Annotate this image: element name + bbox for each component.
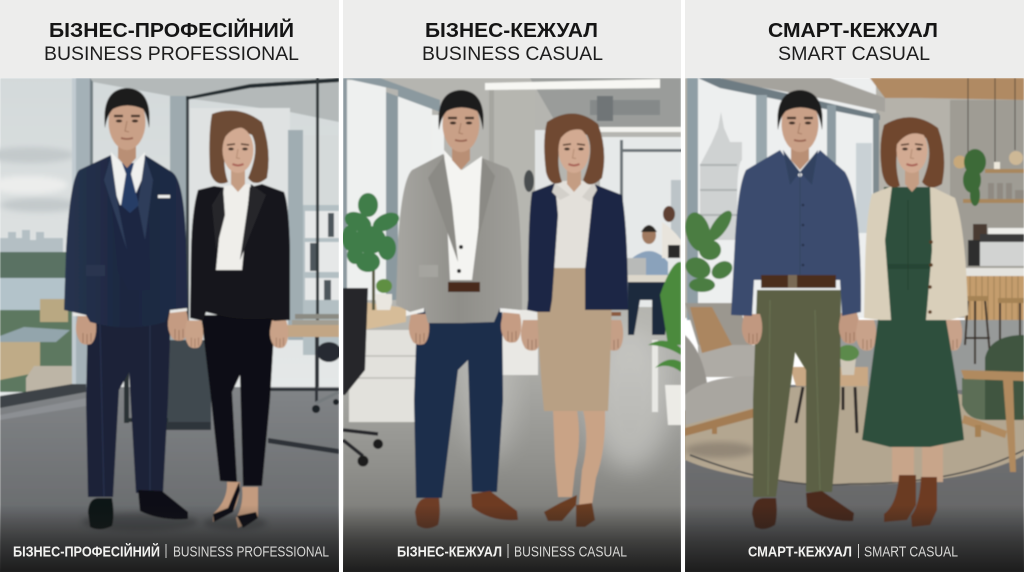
woman in navy cardigan and beige skirt <box>521 113 628 527</box>
heading: business professional: BUSINESS PROFESSIONAL <box>44 44 299 65</box>
man in grey blazer and navy chinos <box>396 90 522 528</box>
man in navy three-piece suit <box>64 88 188 529</box>
office background: glass walls and city view <box>0 78 339 418</box>
caption: business professional: BUSINESS PROFESSIONAL <box>173 544 329 560</box>
man in blue shirt and olive chinos <box>731 90 861 529</box>
heading: smart casual: СМАРТ-КЕЖУАЛ <box>768 20 938 42</box>
heading: business professional <box>0 0 339 78</box>
plant: right <box>648 262 681 372</box>
bottom gradient <box>685 505 1024 572</box>
caption: business casual <box>398 544 627 558</box>
floor, desk, cabinet and chair <box>343 288 681 572</box>
heading: business casual: БІЗНЕС-КЕЖУАЛ <box>425 20 598 42</box>
photo: business casual office <box>342 78 682 572</box>
lounge background: windows, tower, ceiling, wall <box>685 78 1024 336</box>
background colleagues at a desk <box>625 206 681 335</box>
woman in black trouser suit <box>185 110 290 528</box>
coffee table with plant <box>790 345 868 433</box>
panel: business professional <box>0 0 341 572</box>
photo: smart casual lounge <box>660 78 1024 572</box>
woman in green dress, beige cardigan and brown boots <box>856 117 968 527</box>
photo: business professional office <box>0 78 341 572</box>
floor and round rug <box>660 320 1024 572</box>
office background: windows, column and ceiling <box>343 78 681 341</box>
caption: business casual: БІЗНЕС-КЕЖУАЛ <box>397 544 502 560</box>
caption: smart casual: СМАРТ-КЕЖУАЛ <box>748 544 852 560</box>
plant: by the window <box>685 210 734 293</box>
bottom gradient <box>0 505 339 572</box>
sofa with pillow <box>685 303 756 436</box>
plant: left <box>342 193 402 310</box>
floor and office furniture <box>0 314 341 572</box>
caption: business casual: BUSINESS CASUAL <box>514 544 627 560</box>
panel: business casual <box>342 0 682 572</box>
caption: smart casual: SMART CASUAL <box>864 544 958 560</box>
caption: business professional <box>14 543 329 558</box>
caption: business professional: БІЗНЕС-ПРОФЕСІЙНИЙ <box>13 542 160 560</box>
heading: business casual: BUSINESS CASUAL <box>422 44 603 65</box>
heading: smart casual <box>685 0 1024 78</box>
floor shadows <box>82 513 267 531</box>
green armchair <box>961 335 1024 472</box>
heading: business professional: БІЗНЕС-ПРОФЕСІЙНИЙ <box>49 18 294 42</box>
bar stools <box>961 296 1024 364</box>
caption: smart casual <box>748 544 958 558</box>
heading: smart casual: SMART CASUAL <box>778 44 930 65</box>
heading: business casual <box>343 0 681 78</box>
panel: smart casual <box>660 0 1024 572</box>
bottom gradient <box>343 505 681 572</box>
